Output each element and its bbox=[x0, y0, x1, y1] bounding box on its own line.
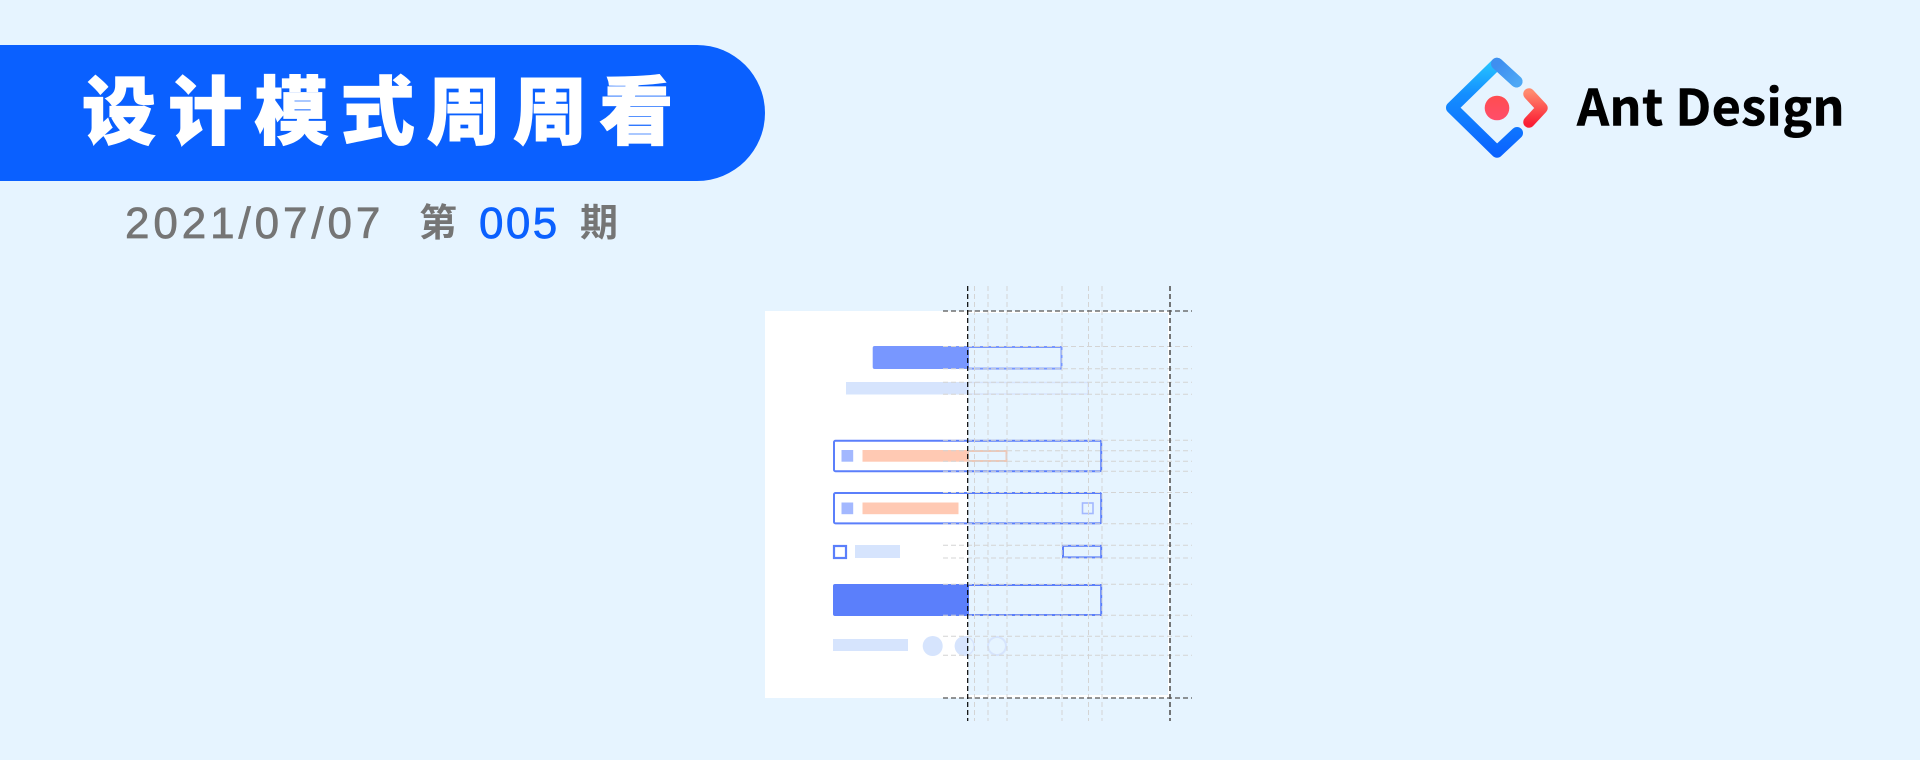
label: qi: 期 bbox=[580, 192, 618, 247]
primary button bbox=[833, 584, 1101, 616]
input field one bbox=[834, 441, 1101, 471]
header banner bbox=[0, 45, 765, 181]
date: 2021/07/07 bbox=[125, 199, 384, 248]
label: di: 第 bbox=[419, 192, 457, 247]
checkbox row bbox=[834, 545, 1101, 558]
icon: diamond mark bbox=[1452, 64, 1542, 152]
banner pill bbox=[0, 45, 765, 181]
logo wordmark: Ant Design bbox=[1576, 68, 1845, 140]
issue date line bbox=[125, 192, 618, 248]
subtitle bar bbox=[846, 382, 1088, 394]
wireframe illustration bbox=[765, 286, 1192, 721]
issue number: 005 bbox=[479, 199, 560, 248]
panel: blueprint half bbox=[968, 313, 1168, 695]
bottom bar with dots bbox=[833, 636, 1006, 656]
panel: white page bbox=[765, 311, 1170, 698]
input field two bbox=[834, 493, 1101, 523]
logo: Ant Design bbox=[1452, 64, 1845, 152]
title: 设计模式周周看 bbox=[82, 53, 685, 160]
heading button bbox=[873, 346, 1062, 369]
guide lines bbox=[943, 286, 1192, 721]
